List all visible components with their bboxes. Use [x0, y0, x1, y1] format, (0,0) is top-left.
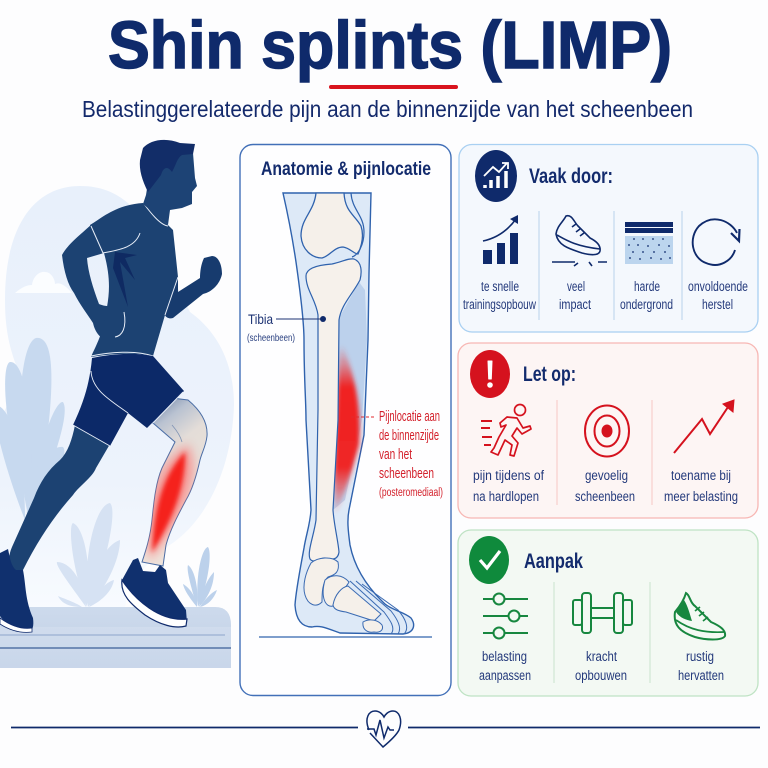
tibia label [247, 311, 326, 344]
panel: let op [458, 343, 758, 518]
labels: vaak door: ondergrond [620, 297, 673, 312]
pain area on tibia [334, 345, 360, 515]
icon: hard ground [625, 222, 673, 264]
metatarsal and toe lines [350, 581, 407, 634]
heading: aanpak: Aanpak [524, 550, 583, 573]
labels: let op: toename bij [671, 468, 731, 483]
labels: let op: meer belasting [664, 489, 738, 504]
labels: vaak door: harde [634, 279, 660, 294]
labels: vaak door: te snelle [481, 279, 519, 294]
shirt folds [113, 252, 137, 307]
labels: aanpak: rustig [686, 649, 714, 664]
pain location label: van het [379, 447, 412, 463]
plant left [0, 338, 65, 530]
labels: aanpak: belasting [482, 649, 527, 664]
calf muscle [333, 282, 367, 510]
foot bones [304, 558, 383, 632]
icon: target [585, 406, 629, 456]
labels: vaak door: herstel [702, 297, 733, 312]
panel: aanpak [458, 530, 758, 696]
shorts [73, 354, 184, 446]
front arm [165, 256, 222, 318]
tibia bone [306, 259, 361, 561]
labels: aanpak: opbouwen [575, 668, 627, 683]
labels: let op: na hardlopen [473, 489, 539, 504]
back arm [62, 224, 127, 339]
dividers [557, 400, 652, 505]
tibia label: (scheenbeen) [247, 332, 295, 344]
plant right [183, 547, 217, 607]
femur [301, 193, 362, 258]
labels: let op: scheenbeen [575, 489, 635, 504]
icon: green shoe [675, 593, 725, 640]
pain location label: (posteromediaal) [379, 487, 443, 499]
icon: rising zigzag arrow [674, 400, 734, 453]
labels: aanpak [479, 649, 724, 683]
femur side line [351, 193, 364, 257]
heading: let op: Let op: [523, 363, 576, 386]
labels: let op: gevoelig [585, 468, 628, 483]
tibia label: Tibia [248, 311, 273, 327]
icon: recovery cycle [693, 219, 740, 265]
dividers [554, 582, 650, 683]
pain location label: de binnenzijde [379, 428, 439, 444]
pain area on leg [147, 445, 193, 560]
torso and shirt [90, 203, 178, 357]
front shoe [122, 558, 187, 627]
footer rule with heart [11, 711, 760, 747]
knee crease lines [172, 425, 182, 442]
labels: vaak door [463, 279, 748, 312]
icon: impact shoe [552, 216, 607, 266]
icon: sliders [483, 594, 528, 638]
illustration: runner scene [0, 140, 234, 668]
badge: check [469, 536, 509, 584]
title underline [329, 85, 458, 89]
pain location label: Pijnlocatie aan [379, 409, 440, 425]
cloud [15, 272, 72, 293]
front leg with knee [142, 398, 207, 566]
back leg [9, 425, 110, 570]
labels: let op: pijn tijdens of [473, 468, 544, 483]
panel: anatomy [240, 144, 451, 696]
background shape [0, 186, 234, 607]
labels: vaak door: impact [559, 297, 591, 312]
labels: vaak door: onvoldoende [688, 279, 748, 294]
icon: heart with pulse [367, 711, 401, 747]
pain location label: scheenbeen [379, 466, 434, 482]
floor line [259, 636, 432, 638]
badge: exclamation [470, 350, 510, 398]
leg soft tissue [283, 193, 414, 634]
labels: let op [473, 468, 738, 504]
plant middle [57, 503, 120, 607]
labels: aanpak: kracht [586, 649, 617, 664]
subtitle: Belastinggerelateerde pijn aan de binnenzijde van het scheenbeen [82, 96, 693, 122]
labels: vaak door: trainingsopbouw [463, 297, 536, 312]
heading: vaak door: Vaak door: [529, 165, 613, 188]
badge: chart [475, 150, 517, 202]
shorts piping [73, 371, 183, 446]
back shoe [0, 549, 33, 632]
icon: rising bars [483, 215, 518, 264]
hair [140, 140, 195, 192]
pain location label [351, 409, 443, 499]
shirt detail lines [91, 204, 178, 356]
dividers [539, 211, 682, 320]
labels: vaak door: veel [567, 279, 585, 294]
title: Shin splints (LIMP) [108, 8, 672, 83]
labels: aanpak: aanpassen [479, 668, 531, 683]
ground [0, 607, 231, 668]
anatomy heading: Anatomie & pijnlocatie [261, 159, 431, 180]
neck and face [143, 153, 197, 225]
panel: vaak door [459, 144, 758, 332]
labels: aanpak: hervatten [678, 668, 724, 683]
icon: runner [481, 404, 531, 456]
icon: dumbbell [573, 593, 632, 633]
